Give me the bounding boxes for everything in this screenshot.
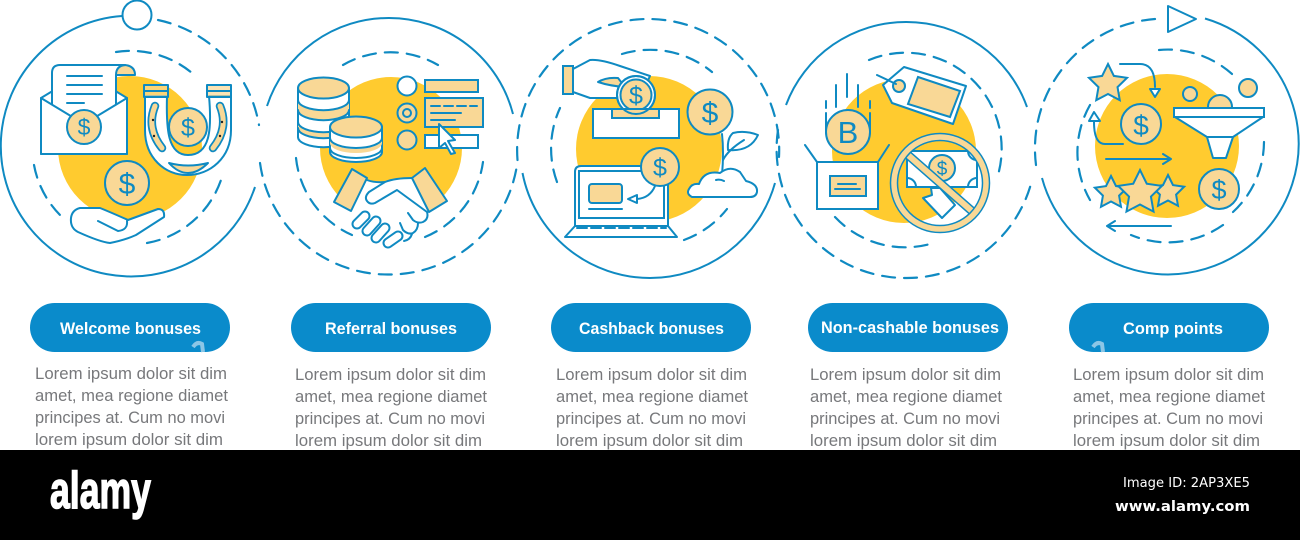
icon: money plant: $ [702,97,719,130]
text block: referral bonuses: principes at. Cum no movi [295,409,485,428]
footer bar [0,450,1300,540]
icon: coin [105,161,149,205]
text block: welcome bonuses: Lorem ipsum dolor sit dim [35,364,227,383]
yellow circle [320,77,462,219]
icon: three stars [1095,170,1184,212]
text block: non-cashable bonuses [810,365,1002,450]
icon: hand dropping coin: $ [629,82,643,110]
icon: falling coin B [826,74,870,154]
panel: welcome bonuses [1,0,259,276]
icon: envelope with letter [41,65,135,154]
logo: alamy: alamy [50,462,151,520]
text block: referral bonuses: amet, mea regione diamet [295,387,487,406]
icon: envelope with letter: $ [78,114,91,140]
text block: comp points [1073,365,1265,450]
text block: non-cashable bonuses: principes at. Cum no movi [810,409,1000,428]
icon: deposit slot box [593,76,679,138]
panel: referral bonuses [260,18,517,275]
icon: horseshoe: $ [181,114,195,142]
outer ring [1,16,259,276]
icon: open box [805,145,889,209]
icon: prohibited cash: $ [937,159,948,180]
panel: non-cashable bonuses [777,22,1032,278]
text block: welcome bonuses: lorem ipsum dolor sit dim [35,430,223,449]
yellow circle [1095,74,1239,218]
icon: radio options [398,76,416,150]
outer ring [777,22,1032,278]
image id: Image ID: 2AP3XE5 [1123,476,1250,491]
website: www.alamy.com [1115,499,1250,515]
arrow: right [1106,154,1171,164]
text block: comp points: Lorem ipsum dolor sit dim [1073,365,1264,384]
outer ring [1035,18,1299,274]
text block: welcome bonuses [35,364,228,449]
yellow circle [832,79,976,223]
icon: large coin stack [298,78,349,147]
icon: prohibited cash [894,137,986,229]
text block: referral bonuses: lorem ipsum dolor sit dim [295,431,482,450]
icon: money plant [688,90,758,197]
icon: handshake [334,168,447,246]
icon: star and coin cycle [1089,64,1161,144]
text block: referral bonuses: Lorem ipsum dolor sit dim [295,365,486,384]
icon: funnel with coins [1174,79,1264,158]
text block: cashback bonuses: Lorem ipsum dolor sit dim [556,365,747,384]
pill: cashback bonuses [551,303,751,352]
icon: web form with cursor [425,80,483,154]
outer ring [260,18,517,275]
text block: cashback bonuses [556,365,748,450]
yellow circle [58,76,202,220]
yellow circle [576,76,722,222]
text block: comp points: principes at. Cum no movi [1073,409,1263,428]
text block: cashback bonuses: principes at. Cum no movi [556,409,746,428]
text block: welcome bonuses: amet, mea regione diamet [35,386,228,405]
icon: coin [1199,169,1239,209]
pill: referral bonuses: Referral bonuses [325,320,457,338]
icon: hand dropping coin [563,60,655,114]
icon: laptop with cashback arrow [565,148,679,237]
text block: non-cashable bonuses: amet, mea regione diamet [810,387,1002,406]
icon: play triangle node [1168,6,1196,32]
pill: cashback bonuses: Cashback bonuses [579,320,724,338]
icon: laptop with cashback arrow: $ [653,154,667,182]
text block: comp points: lorem ipsum dolor sit dim [1073,431,1260,450]
outer ring [517,19,779,278]
arrow: left [1107,221,1171,231]
pill: non-cashable bonuses [808,303,1008,352]
pill: referral bonuses [291,303,491,352]
icon: falling coin B: B [838,115,858,150]
pill: welcome bonuses: Welcome bonuses [60,320,201,338]
panel: comp points [1035,6,1299,274]
text block: cashback bonuses: amet, mea regione diamet [556,387,748,406]
panel: cashback bonuses [517,19,779,278]
pill: comp points [1069,303,1269,352]
text block: welcome bonuses: principes at. Cum no movi [35,408,225,427]
icon: star and coin cycle: $ [1133,110,1149,141]
icon: small coin stack [330,116,382,162]
text block: non-cashable bonuses: lorem ipsum dolor sit dim [810,431,997,450]
text block: cashback bonuses: lorem ipsum dolor sit dim [556,431,743,450]
text block: referral bonuses [295,365,487,450]
icon: start node circle [122,0,152,30]
pill: non-cashable bonuses: Non-cashable bonuses [821,319,999,337]
pill: comp points: Comp points [1123,320,1223,338]
icon: price tag [877,67,966,124]
text block: comp points: amet, mea regione diamet [1073,387,1265,406]
text block: non-cashable bonuses: Lorem ipsum dolor sit dim [810,365,1001,384]
icon: horseshoe [144,85,231,175]
icon: coin: $ [119,168,136,201]
icon: open hand [71,208,164,243]
pill: welcome bonuses [30,303,230,352]
icon: coin: $ [1211,175,1227,205]
